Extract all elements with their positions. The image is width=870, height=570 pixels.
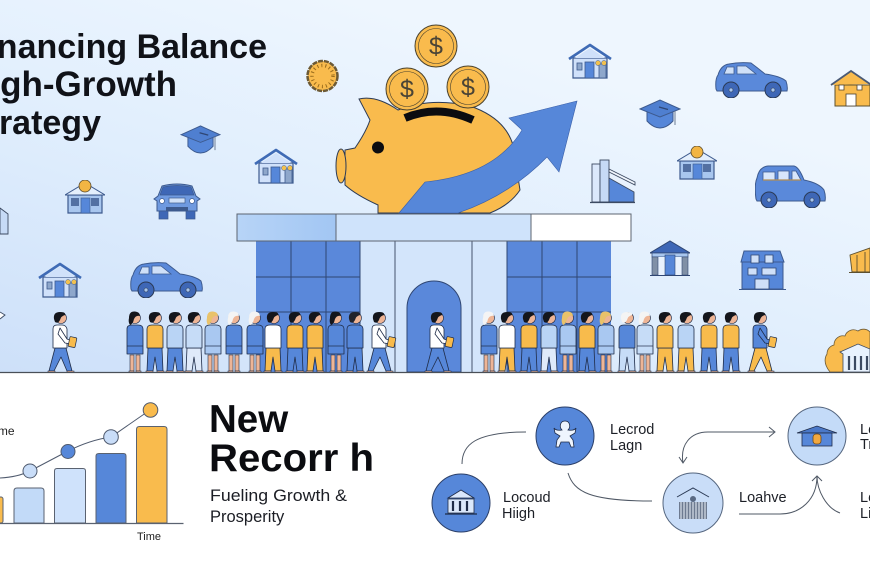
chart: bars <box>0 426 167 523</box>
flow: node building <box>663 473 723 533</box>
icon: car left <box>131 263 202 298</box>
flow: labels: Lagn <box>610 438 642 454</box>
title <box>0 28 267 142</box>
flow: node bank <box>432 474 490 532</box>
icon: dollar coins: $ <box>461 74 475 102</box>
icon: partial roof left <box>0 312 5 319</box>
heading: new record: New <box>209 398 289 441</box>
heading: new record <box>209 398 374 480</box>
building <box>237 214 631 372</box>
icon: yellow house <box>831 71 870 106</box>
icon: yellow temple <box>849 248 870 272</box>
icon: front-view car <box>154 184 200 219</box>
building: right glass <box>507 241 611 372</box>
icon: house with coin right <box>677 146 717 179</box>
icon: bush with bank <box>825 329 870 372</box>
flow: labels: Locoud <box>503 490 551 506</box>
icon: hatchback <box>755 166 825 208</box>
icon: house top right <box>569 45 611 78</box>
icon: house centre left <box>255 150 297 183</box>
icon: house with coin left <box>65 180 105 213</box>
icon: graduation cap right <box>640 100 680 128</box>
icon: bank <box>650 241 690 276</box>
icon: dollar coins: $ <box>429 32 443 60</box>
flow: node person <box>536 407 594 465</box>
subheading <box>210 487 347 526</box>
subheading: Prosperity <box>210 508 285 526</box>
heading: new record: Recorr h <box>209 437 374 480</box>
subheading: Fueling Growth & <box>210 487 347 505</box>
icon: car top right <box>716 63 787 98</box>
panel: growth bar chart <box>0 403 184 543</box>
chart: axis labels: Time <box>137 531 161 543</box>
panel: process flow <box>432 407 870 533</box>
icon: books building <box>590 160 635 202</box>
icon: dollar coins: $ <box>400 76 414 104</box>
icon: dollar coins <box>386 25 489 110</box>
illustration: piggy bank <box>336 98 520 213</box>
building: roof <box>237 214 631 241</box>
flow: labels: Lecrod <box>610 422 654 438</box>
background: sky panel <box>0 0 870 373</box>
flow: labels: Loahve <box>739 490 787 506</box>
flow: labels: Hiigh <box>502 506 535 522</box>
chart: axis labels <box>0 424 161 543</box>
icon: graduation cap left <box>181 126 220 153</box>
people queue <box>48 311 777 372</box>
icon: blue office building <box>739 251 786 290</box>
flow: labels <box>502 422 870 522</box>
flow: node safe <box>788 407 846 465</box>
icon: sun badge <box>308 61 338 91</box>
icon: house left <box>39 264 81 297</box>
building: left wall <box>360 241 507 372</box>
flow: connectors <box>462 427 840 514</box>
building: arched door <box>407 281 461 372</box>
icon: partial building left <box>0 208 8 234</box>
building: left glass <box>256 241 360 372</box>
chart: trend line <box>0 403 158 478</box>
arrow: growth <box>399 101 577 213</box>
